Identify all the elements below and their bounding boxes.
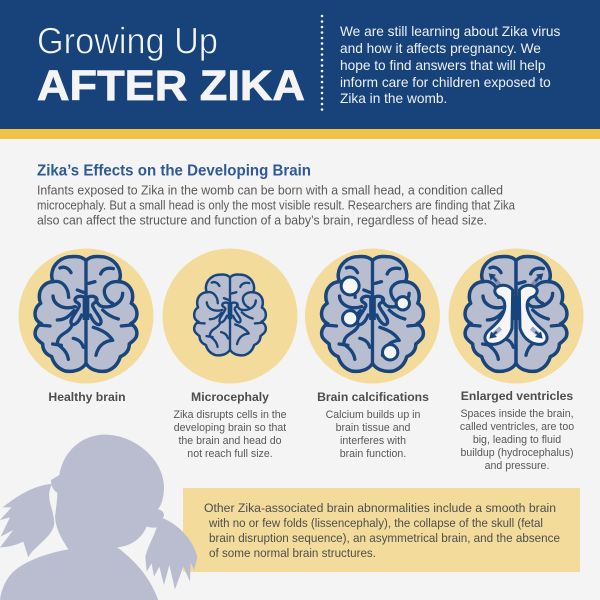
intro paragraph: Infants exposed to Zika in the womb can be born with a small head, a condition called <box>37 182 503 198</box>
panel: brain calcifications <box>305 248 440 460</box>
section heading: Zika’s Effects on the Developing Brain <box>37 162 311 180</box>
title <box>37 20 305 110</box>
panel: brain calcifications: brain function. <box>340 448 406 460</box>
header intro text: hope to find answers that will help <box>340 58 546 73</box>
icon: brain with enlarged ventricles <box>465 256 567 371</box>
icon: brain with calcifications <box>322 256 423 371</box>
panel: microcephaly: not reach full size. <box>187 448 273 460</box>
header intro text: We are still learning about Zika virus <box>340 24 561 39</box>
header intro text: inform care for children exposed to <box>340 75 551 90</box>
panel: microcephaly: Microcephaly <box>191 390 269 404</box>
panel: enlarged ventricles: Spaces inside the brain, <box>460 408 574 420</box>
panel: brain calcifications: interferes with <box>340 435 406 447</box>
panel: brain calcifications: Brain calcifications <box>317 390 429 404</box>
panel: healthy brain: Healthy brain <box>48 390 126 404</box>
icon: healthy brain <box>35 256 137 371</box>
panel: microcephaly: the brain and head do <box>178 435 282 447</box>
callout text: Other Zika-associated brain abnormalities include a smooth brain <box>204 501 556 515</box>
panel: enlarged ventricles: called ventricles, are too <box>460 421 574 433</box>
panel: enlarged ventricles: big, leading to fluid <box>473 434 561 446</box>
panel: brain calcifications: brain tissue and <box>336 422 411 434</box>
intro paragraph: also can affect the structure and function of a baby’s brain, regardless of head size. <box>37 212 487 228</box>
panel: enlarged ventricles: and pressure. <box>485 460 549 472</box>
callout text: of some normal brain structures. <box>209 546 376 560</box>
panel: enlarged ventricles: Enlarged ventricles <box>461 389 573 403</box>
header band <box>0 0 600 129</box>
panel: microcephaly: Zika disrupts cells in the <box>173 409 287 421</box>
callout box <box>183 488 580 572</box>
silhouette of child <box>0 435 197 600</box>
intro paragraph: microcephaly. But a small head is only the most visible result. Researchers are finding that Zika <box>37 198 516 212</box>
header intro text: Zika in the womb. <box>340 91 447 106</box>
intro paragraph <box>37 182 516 228</box>
title: Growing Up <box>37 20 218 62</box>
header intro text: and how it affects pregnancy. We <box>340 41 541 56</box>
icon: small brain <box>194 275 266 355</box>
callout text <box>204 501 560 560</box>
panel: brain calcifications: Calcium builds up in <box>326 409 421 421</box>
title: AFTER ZIKA <box>37 62 305 110</box>
panel: healthy brain <box>18 248 154 404</box>
panel: enlarged ventricles <box>448 248 584 472</box>
dotted divider <box>321 16 323 115</box>
callout text: with no or few folds (lissencephaly), the collapse of the skull (fetal <box>208 516 543 530</box>
panel: microcephaly: developing brain so that <box>174 422 286 434</box>
panel: microcephaly <box>162 248 298 460</box>
panel: enlarged ventricles: buildup (hydrocephalus) <box>460 447 574 459</box>
gold stripe <box>0 129 600 139</box>
header intro text <box>340 24 561 106</box>
callout text: brain disruption sequence), an asymmetrical brain, and the absence <box>209 531 560 545</box>
